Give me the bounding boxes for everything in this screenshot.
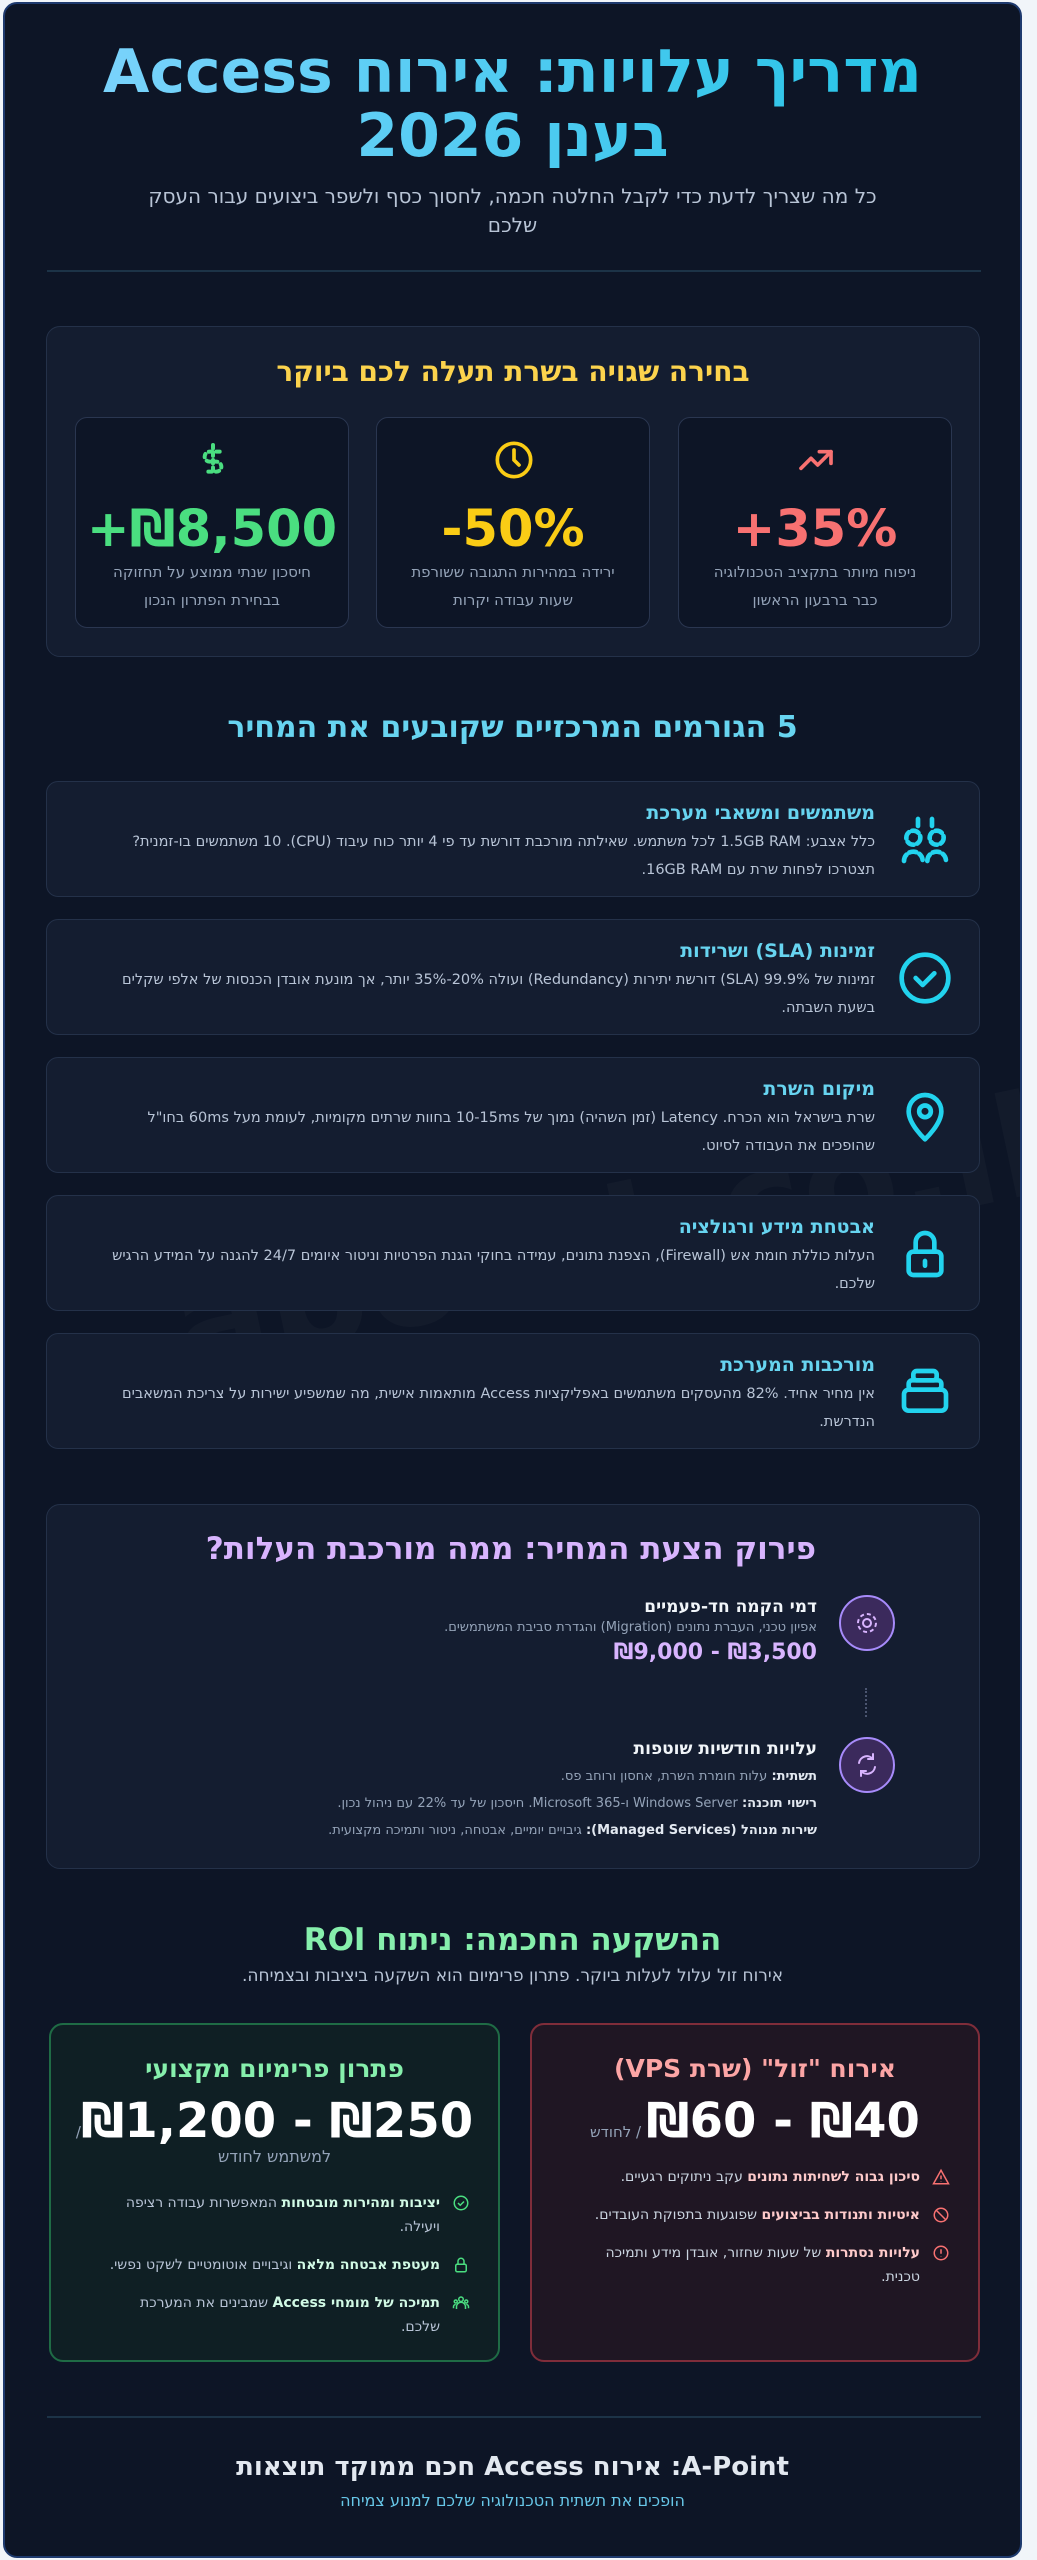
title: מדריך עלויות: אירוח Access bbox=[103, 37, 922, 107]
item: setup fee: דמי הקמה חד-פעמיים bbox=[644, 1597, 817, 1617]
factor: SLA bbox=[46, 919, 980, 1035]
card: premium solution: פתרון פרימיום מקצועי bbox=[145, 2054, 404, 2083]
factor: SLA: זמינות של 99.9% (SLA) דורשת יתירות (Redundancy) ועולה 20%-35% יותר, אך מונעת אובדן הכנסות של אלפי שקלים בשעת השבתה. bbox=[122, 972, 875, 1016]
factor: complexity: מורכבות המערכת bbox=[720, 1354, 875, 1376]
panel: price breakdown bbox=[46, 1504, 980, 1869]
card: premium solution: למשתמש לחודש bbox=[218, 2147, 331, 2166]
price: / bbox=[76, 2123, 81, 2141]
stat: savings: +₪8,500 bbox=[87, 500, 337, 559]
price: ₪60 - ₪40 bbox=[646, 2093, 920, 2149]
factor: SLA: זמינות (SLA) ושרידות bbox=[680, 940, 875, 962]
stat: savings: בבחירת הפתרון הנכון bbox=[144, 591, 280, 609]
price: לחודש / bbox=[590, 2123, 641, 2141]
icon: map pin bbox=[906, 1092, 944, 1142]
benefit list: תמיכה של מומחי Access שמבינים את המערכת שלכם. bbox=[140, 2295, 440, 2335]
stat: budget bloat: +35% bbox=[733, 500, 897, 559]
factor: location: מיקום השרת bbox=[763, 1078, 875, 1100]
stat: budget bloat: כבר ברבעון הראשון bbox=[752, 591, 878, 609]
stat: response time bbox=[376, 417, 650, 628]
footer title: A-Point: אירוח Access חכם ממוקד תוצאות bbox=[236, 2452, 789, 2482]
price: ₪1,200 - ₪250 bbox=[81, 2093, 473, 2149]
title: בענן 2026 bbox=[356, 101, 669, 171]
icon: lock bbox=[906, 1230, 944, 1278]
panel: wrong choice costs bbox=[46, 326, 980, 657]
stat: response time: שעות עבודה יקרות bbox=[453, 591, 573, 609]
item: monthly costs: שירות מנוהל (Managed Services): גיבויים יומיים, אבטחה, ניטור ותמיכה מקצועית. bbox=[328, 1823, 817, 1838]
card: premium solution bbox=[49, 2023, 500, 2362]
stat: budget bloat: ניפוח מיותר בתקציב הטכנולוגיה bbox=[714, 563, 916, 581]
icon: gear bbox=[839, 1595, 895, 1651]
factor: users: כלל אצבע: 1.5GB RAM לכל משתמש. שאילתה מורכבת דורשת עד פי 4 יותר כוח עיבוד (CPU). 10 משתמשים בו-זמנית? תצטרכו לפחות שרת עם 16GB RAM. bbox=[132, 834, 875, 878]
factor: location bbox=[46, 1057, 980, 1173]
panel heading: בחירה שגויה בשרת תעלה לכם ביוקר bbox=[276, 355, 750, 388]
benefit list: יציבות ומהירות מובטחות המאפשרות עבודה רציפה ויעילה. bbox=[126, 2195, 440, 2235]
item: monthly costs: עלויות חודשיות שוטפות bbox=[634, 1739, 817, 1759]
heading: פירוק הצעת המחיר: ממה מורכבת העלות? bbox=[206, 1531, 816, 1567]
icon: check circle bbox=[899, 952, 951, 1004]
title bbox=[65, 40, 960, 168]
footer subtitle: הופכים את תשתית הטכנולוגיה שלכם למנוע צמיחה bbox=[340, 2491, 685, 2510]
stat: response time: ירידה במהירות התגובה ששורפת bbox=[411, 563, 615, 581]
stat: savings: חיסכון שנתי ממוצע על תחזוקה bbox=[113, 563, 311, 581]
factor: complexity: אין מחיר אחיד. 82% מהעסקים משתמשים באפליקציות Access מותאמות אישית, מה שמשפיע ישירות על צריכת המשאבים הנדרשת. bbox=[122, 1386, 875, 1430]
factor: location: שרת בישראל הוא הכרח. Latency (זמן השהיה) נמוך של 10-15ms בחוות שרתים מקומיות, לעומת מעל 60ms בחו"ל שהופכים את העבודה לסיוט. bbox=[148, 1110, 875, 1154]
item: setup fee: אפיון טכני, העברת נתונים (Migration) והגדרת סביבת המשתמשים. bbox=[444, 1620, 817, 1635]
factor: users: משתמשים ומשאבי מערכת bbox=[646, 802, 875, 824]
stat: savings bbox=[75, 417, 349, 628]
factor: users bbox=[46, 781, 980, 897]
subtitle: כל מה שצריך לדעת כדי לקבל החלטה חכמה, לחסוך כסף ולשפר ביצועים עבור העסק שלכם bbox=[148, 184, 877, 237]
stat: response time: -50% bbox=[441, 500, 585, 559]
icon: refresh bbox=[839, 1737, 895, 1793]
connector bbox=[865, 1688, 867, 1717]
factor: complexity bbox=[46, 1333, 980, 1449]
item: monthly costs: רישוי תוכנה: Windows Server ו-Microsoft 365. חיסכון של עד 22% עם ניהול נכון. bbox=[337, 1796, 817, 1811]
card: cheap hosting: אירוח "זול" (שרת VPS) bbox=[614, 2054, 896, 2083]
risk list: עלויות נסתרות של שעות שחזור, אובדן מידע ותמיכה טכנית. bbox=[605, 2245, 920, 2285]
item: monthly costs: תשתית: עלות חומרת השרת, אחסון ורוחב פס. bbox=[561, 1769, 817, 1784]
item: setup fee: ₪9,000 - ₪3,500 bbox=[614, 1640, 817, 1665]
risk list: איטיות ותנודות בביצועים שפוגעות בתפוקת העובדים. bbox=[595, 2207, 920, 2223]
stat: budget bloat bbox=[678, 417, 952, 628]
benefit list bbox=[110, 2195, 470, 2335]
card: cheap hosting bbox=[530, 2023, 980, 2362]
benefit list: מעטפת אבטחה מלאה וגיבויים אוטומטיים לשקט נפשי. bbox=[110, 2257, 440, 2273]
factor: security bbox=[46, 1195, 980, 1311]
item: monthly costs bbox=[328, 1737, 895, 1838]
icon: layers bbox=[902, 1368, 948, 1413]
ROI subtitle: אירוח זול עלול לעלות ביוקר. פתרון פרימיום הוא השקעה ביציבות ובצמיחה. bbox=[242, 1966, 783, 1986]
icon: users bbox=[902, 816, 948, 864]
factor: security: אבטחת מידע ורגולציה bbox=[679, 1216, 875, 1238]
risk list bbox=[595, 2168, 950, 2285]
factor: security: העלות כוללת חומת אש (Firewall), הצפנת נתונים, עמידה בחוקי הגנת הפרטיות וניטור איומים 24/7 להגנה על המידע הרגיש שלכם. bbox=[112, 1248, 875, 1292]
item: setup fee bbox=[444, 1595, 895, 1665]
risk list: סיכון גבוה לשחיתות נתונים עקב ניתוקים רגעיים. bbox=[621, 2169, 920, 2185]
section heading: 5 factors: 5 הגורמים המרכזיים שקובעים את המחיר bbox=[227, 710, 798, 745]
ROI heading: ההשקעה החכמה: ניתוח ROI bbox=[304, 1922, 721, 1958]
